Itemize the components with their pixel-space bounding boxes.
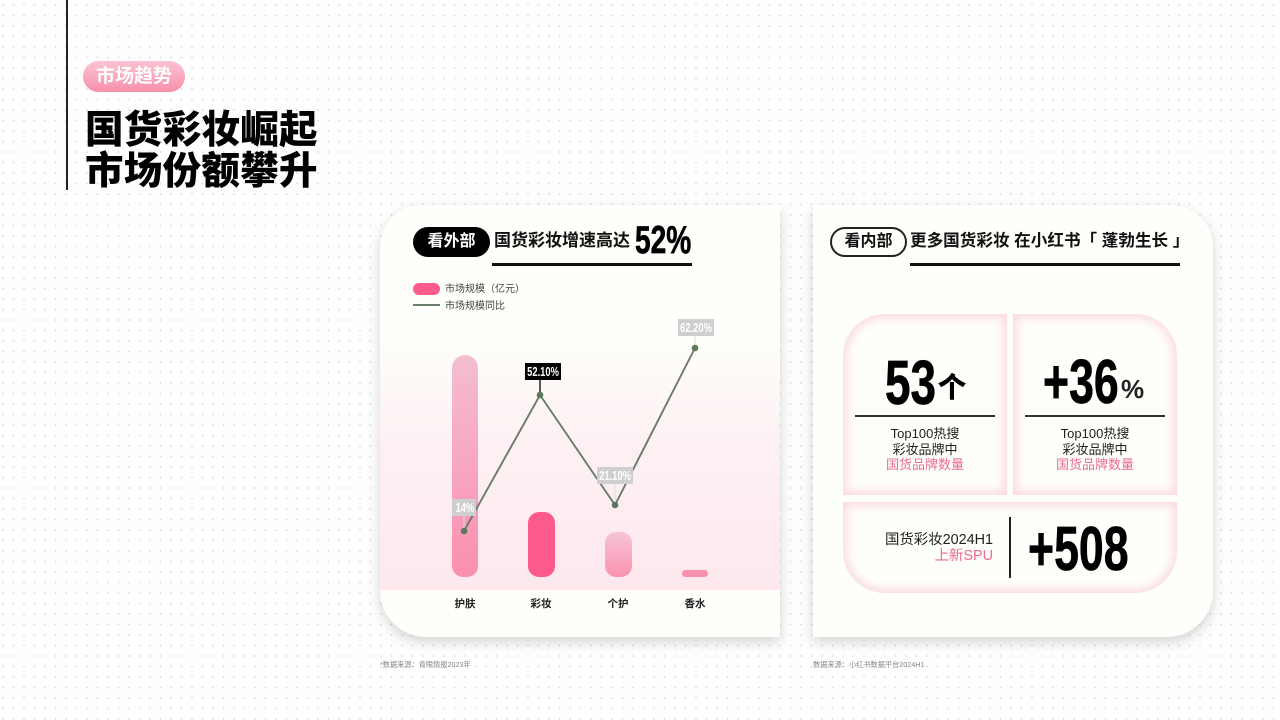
legend label: market size: 市场规模（亿元） xyxy=(445,284,525,295)
unit percent: % xyxy=(1121,374,1144,404)
SPU description: 上新SPU xyxy=(935,548,993,564)
source note left: *数据来源：青眼情报2023年 xyxy=(380,660,471,669)
data label 14%: 14% xyxy=(456,500,474,515)
panel heading pill xyxy=(413,227,490,257)
stat description xyxy=(886,426,964,472)
axis label: skincare: 护肤 xyxy=(454,598,476,610)
stat description: 国货品牌数量 xyxy=(1056,457,1134,472)
unit 个: 个 xyxy=(938,372,966,403)
title xyxy=(85,99,318,196)
heading underline xyxy=(492,263,692,266)
stat description: 国货品牌数量 xyxy=(886,457,964,472)
trend line chart xyxy=(460,336,698,534)
big number 53: 53 xyxy=(885,349,936,418)
divider xyxy=(855,415,995,417)
legend swatch: market size xyxy=(413,283,440,295)
panel: external view xyxy=(380,205,780,637)
legend xyxy=(413,283,525,312)
axis label: personal care: 个护 xyxy=(608,598,628,610)
source note right: 数据来源：小红书数据平台2024H1 xyxy=(813,660,924,669)
heading underline xyxy=(910,263,1180,266)
stat description: Top100热搜 xyxy=(891,426,959,441)
title: 国货彩妆崛起 xyxy=(85,99,318,155)
data label 14% xyxy=(452,499,476,516)
panel heading pill: 看外部 xyxy=(427,233,476,250)
legend label: yoy: 市场规模同比 xyxy=(445,301,505,312)
data label 62.20%: 62.20% xyxy=(680,320,712,335)
vertical divider xyxy=(1009,517,1011,578)
category tag xyxy=(83,61,185,92)
big number +36: +36 xyxy=(1043,348,1119,417)
left vertical rule xyxy=(66,0,68,190)
axis label: fragrance: 香水 xyxy=(684,598,706,610)
stat description: 彩妆品牌中 xyxy=(892,442,958,456)
chart background gradient xyxy=(380,340,780,590)
stat box: new SPU xyxy=(843,502,1177,593)
SPU description: 国货彩妆2024H1 xyxy=(885,532,993,548)
panel: internal view xyxy=(813,205,1213,637)
stat description: Top100热搜 xyxy=(1061,426,1129,441)
panel heading text: 更多国货彩妆 在小红书「 蓬勃生长 」 xyxy=(910,231,1189,250)
stat box: brand count xyxy=(843,314,1007,495)
data label 21.10%: 21.10% xyxy=(599,468,631,483)
panel heading text: 国货彩妆增速高达 xyxy=(494,231,630,250)
bar: fragrance xyxy=(682,570,708,577)
data label 52.10%: 52.10% xyxy=(527,364,559,379)
title: 市场份额攀升 xyxy=(85,140,318,196)
panel heading pill: 看内部 xyxy=(844,233,892,250)
panel heading pill xyxy=(830,227,907,257)
category tag: 市场趋势 xyxy=(96,66,172,87)
bar: personal care xyxy=(605,532,632,577)
big number +508: +508 xyxy=(1028,515,1129,584)
axis label: makeup: 彩妆 xyxy=(530,598,552,610)
bar: makeup xyxy=(528,512,555,577)
stat description xyxy=(1056,426,1134,472)
SPU description xyxy=(885,532,993,564)
headline number: 52% xyxy=(635,219,691,262)
divider xyxy=(1025,415,1165,417)
bar: skincare xyxy=(452,355,478,577)
stat box: brand growth xyxy=(1013,314,1177,495)
legend line: yoy xyxy=(413,304,440,306)
stat description: 彩妆品牌中 xyxy=(1062,442,1128,456)
